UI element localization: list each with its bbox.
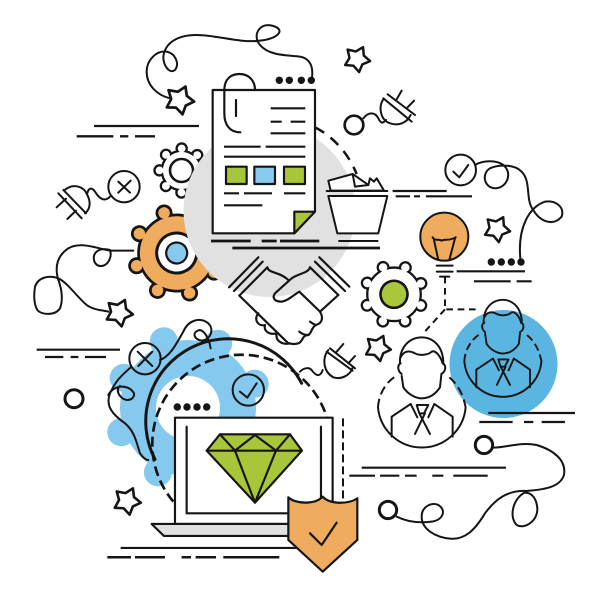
lines right of bin xyxy=(393,191,472,196)
laptop base xyxy=(152,524,340,536)
plug on arc xyxy=(300,344,355,378)
person right on blue circle xyxy=(464,300,541,397)
small white gear xyxy=(160,148,204,192)
plug with x circle xyxy=(57,171,140,219)
green gear xyxy=(356,256,432,332)
square green 1 xyxy=(226,167,247,184)
motion lines left xyxy=(37,350,120,357)
orange gear xyxy=(124,200,230,306)
square blue xyxy=(254,167,275,184)
square green 2 xyxy=(284,167,305,184)
top thread with star xyxy=(147,25,312,98)
star right xyxy=(481,211,514,244)
four dots right xyxy=(488,258,525,266)
lines right of bulb xyxy=(457,271,532,281)
dashed line right of laptop xyxy=(340,418,346,503)
star bottom xyxy=(110,483,145,517)
page fold xyxy=(294,212,315,233)
check circle on blue gear xyxy=(233,374,264,406)
document xyxy=(213,74,315,233)
dashed and solid arcs around laptop xyxy=(146,339,327,502)
laptop xyxy=(152,418,340,536)
motion lines upper left xyxy=(77,126,199,136)
four dots above laptop xyxy=(174,403,210,411)
paper clip xyxy=(224,74,255,132)
x circle with blue area thread xyxy=(108,320,211,460)
dashed arc document to bin xyxy=(315,127,357,174)
lines under laptop xyxy=(107,548,300,557)
lines right of persons xyxy=(349,413,575,476)
handshake xyxy=(229,257,349,344)
blue circle behind person xyxy=(450,310,558,418)
light bulb xyxy=(420,213,468,277)
star top left xyxy=(162,81,198,117)
star top right xyxy=(341,41,374,74)
plug with ring top right xyxy=(345,91,415,134)
diamond xyxy=(207,434,302,503)
star left xyxy=(102,294,137,329)
shield xyxy=(288,497,357,572)
text lines xyxy=(224,108,305,205)
check circle with thread xyxy=(445,155,562,262)
blue gear xyxy=(97,317,279,499)
bottom right thread with rings xyxy=(379,436,564,539)
grey circle behind document xyxy=(184,125,356,297)
left thread xyxy=(34,245,133,314)
person left xyxy=(378,337,466,447)
lines under document xyxy=(211,241,380,248)
ring left xyxy=(65,390,83,408)
dashed connector from bulb xyxy=(423,277,478,333)
star center xyxy=(362,331,395,363)
paper bin xyxy=(327,174,387,233)
four dots above document xyxy=(276,77,315,84)
